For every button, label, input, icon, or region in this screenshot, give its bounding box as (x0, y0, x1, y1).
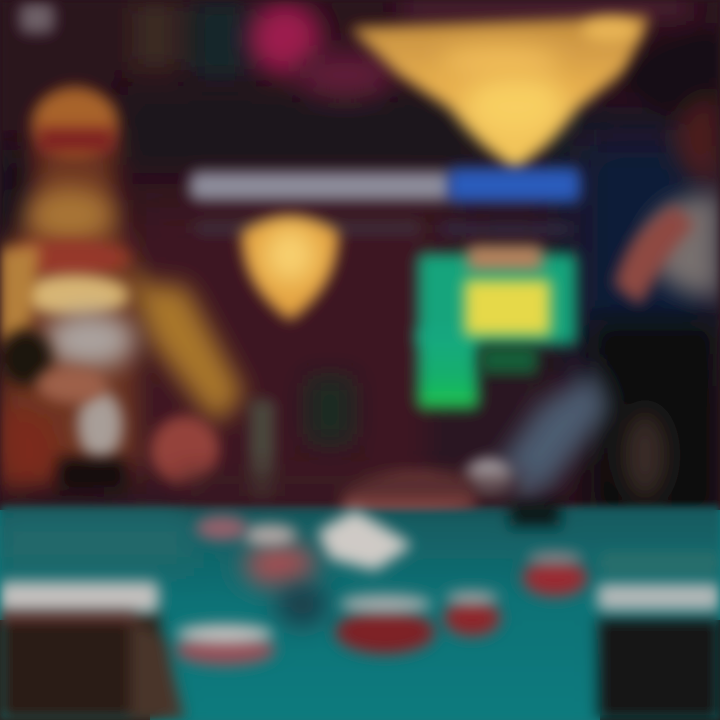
foreground chips left (0, 582, 185, 720)
man in hat right (340, 33, 720, 520)
blurred title text (190, 168, 580, 234)
pink curtain (249, 0, 690, 99)
gold chandelier (350, 16, 650, 170)
playing cards at table centre (196, 510, 412, 587)
gold costumed figure left (0, 88, 274, 495)
green and yellow logo (305, 246, 576, 445)
teal poker table (0, 475, 720, 720)
wall lamp top left (20, 3, 54, 33)
gold shield emblem (242, 217, 338, 320)
poker chip stacks (175, 552, 587, 665)
foreground chips right (598, 552, 720, 720)
